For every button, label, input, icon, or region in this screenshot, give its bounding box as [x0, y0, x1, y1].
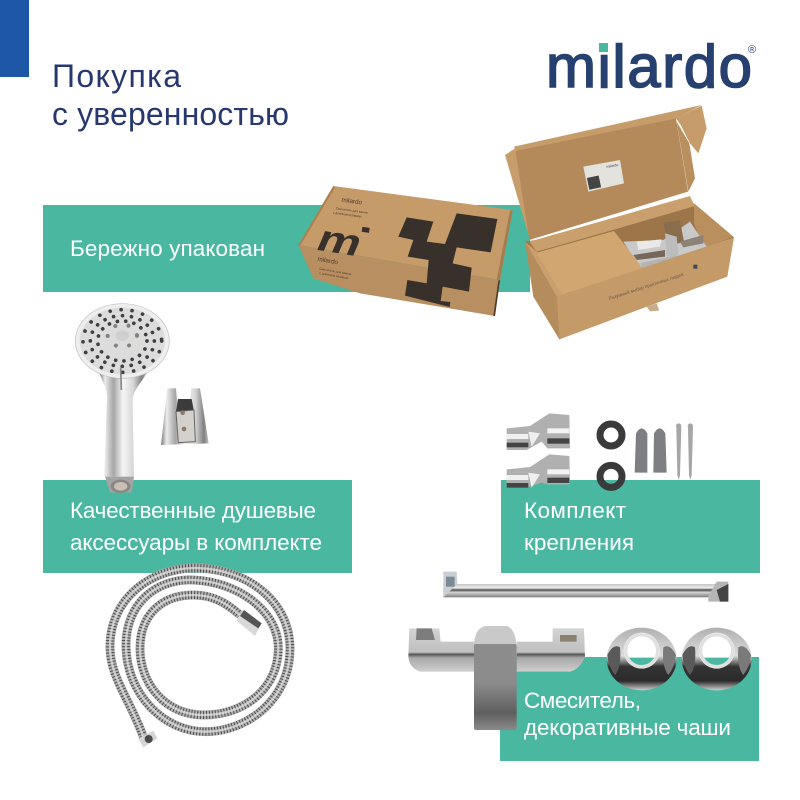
screws	[676, 423, 693, 480]
closed box	[298, 186, 513, 316]
heading: mixer and decorative cups: Смеситель,	[524, 688, 641, 713]
logo: milardo: ®	[748, 44, 756, 56]
heading: carefully packed: Бережно упакован	[70, 236, 265, 261]
decorative cups	[607, 628, 752, 690]
heading: mounting kit	[524, 498, 634, 555]
metal parts in the box	[623, 221, 707, 268]
heading: mounting kit: Комплект	[524, 498, 626, 523]
logo: milardo: milardo	[546, 33, 752, 100]
mixer body	[408, 626, 585, 730]
panel: packaging band	[43, 205, 530, 292]
closed box: с длинным изливом	[319, 271, 348, 280]
heading: mounting kit: крепления	[524, 530, 634, 555]
closed box: milardo	[341, 197, 363, 207]
shower holder	[161, 388, 209, 445]
title: с уверенностью	[52, 96, 289, 132]
shower hose nut	[105, 477, 134, 493]
closed box: Смеситель для ванны	[336, 206, 369, 215]
panel: mixer band	[500, 657, 759, 761]
heading: mixer and decorative cups	[524, 688, 731, 740]
wall spout	[443, 572, 728, 602]
mounting kit parts	[507, 413, 693, 488]
shower face	[75, 304, 169, 390]
heading: quality shower accessories	[70, 498, 322, 555]
closed box: m	[310, 219, 369, 264]
shower handle	[99, 373, 147, 477]
shower head and holder	[75, 304, 209, 493]
heading: quality shower accessories: аксессуары в комплекте	[70, 530, 322, 555]
open box	[505, 105, 734, 339]
flexible shower hose	[110, 568, 290, 747]
title	[52, 58, 289, 132]
open box: milardo	[606, 163, 619, 169]
angled fittings	[507, 413, 570, 488]
title: Покупка	[52, 58, 181, 94]
closed box: milardo	[317, 256, 339, 266]
rubber rings	[600, 424, 622, 487]
wall plugs	[635, 428, 667, 473]
panel: mounting kit band	[501, 480, 760, 573]
closed box: с длинным изливом	[333, 211, 362, 219]
closed box: Смеситель для ванны	[319, 267, 352, 276]
open box: Разумный выбор практичных людей	[608, 271, 685, 301]
heading: mixer and decorative cups: декоративные чаши	[524, 715, 731, 740]
panel: shower accessories band	[43, 480, 352, 573]
heading: quality shower accessories: Качественные душевые	[70, 498, 316, 523]
corner accent	[0, 0, 29, 77]
